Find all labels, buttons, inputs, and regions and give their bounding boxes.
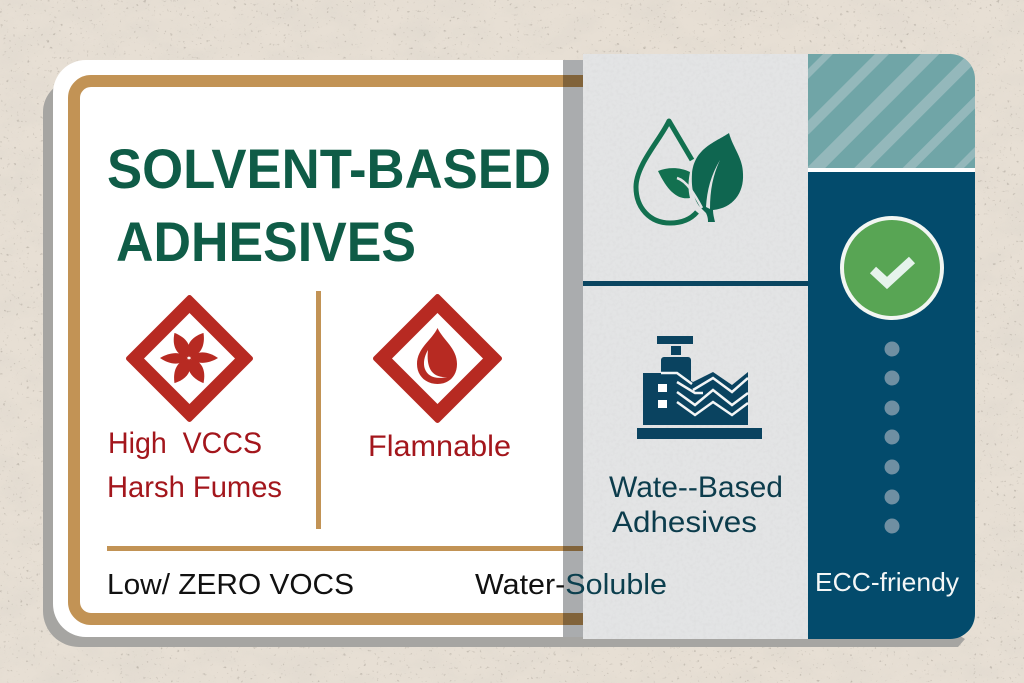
label: high VOCs harsh fumes: High VCCS <box>108 427 262 460</box>
icon: factory with waves <box>637 336 762 439</box>
icon: hazard diamond with drop <box>376 296 500 420</box>
card drop shadow <box>43 80 965 647</box>
label: low/zero VOCs: Low/ ZERO VOCS <box>107 569 354 601</box>
label: flammable: Flamnable <box>368 430 511 463</box>
panel: solvent-based white card <box>53 60 583 637</box>
divider: vertical gold <box>316 291 321 529</box>
label: water-based adhesives: Wate--Based <box>609 471 783 504</box>
panel: teal hatched header <box>808 54 975 168</box>
label: eco-friendly: ECC-friendy <box>815 567 959 597</box>
heading: solvent-based adhesives: ADHESIVES <box>116 210 416 273</box>
gold frame <box>74 81 583 619</box>
dotted vertical connector <box>884 342 900 534</box>
separator: white <box>808 168 975 172</box>
label: water-based adhesives <box>609 471 783 539</box>
icon: hazard diamond with flower <box>128 298 250 420</box>
divider: horizontal gold <box>107 546 583 551</box>
label: high VOCs harsh fumes: Harsh Fumes <box>107 471 282 504</box>
label: water-based adhesives: Adhesives <box>612 506 757 539</box>
icon: water drop and leaves <box>636 121 743 223</box>
heading: solvent-based adhesives <box>107 137 551 273</box>
label: high VOCs harsh fumes <box>107 427 282 504</box>
divider: navy <box>583 281 808 286</box>
overlap band <box>563 60 583 637</box>
icon: green check badge <box>842 218 942 318</box>
panel: navy eco column <box>808 172 975 639</box>
label: water-soluble: Water-Soluble <box>475 569 667 601</box>
heading: solvent-based adhesives: SOLVENT-BASED <box>107 137 551 200</box>
panel: water-based grey column <box>583 54 808 639</box>
